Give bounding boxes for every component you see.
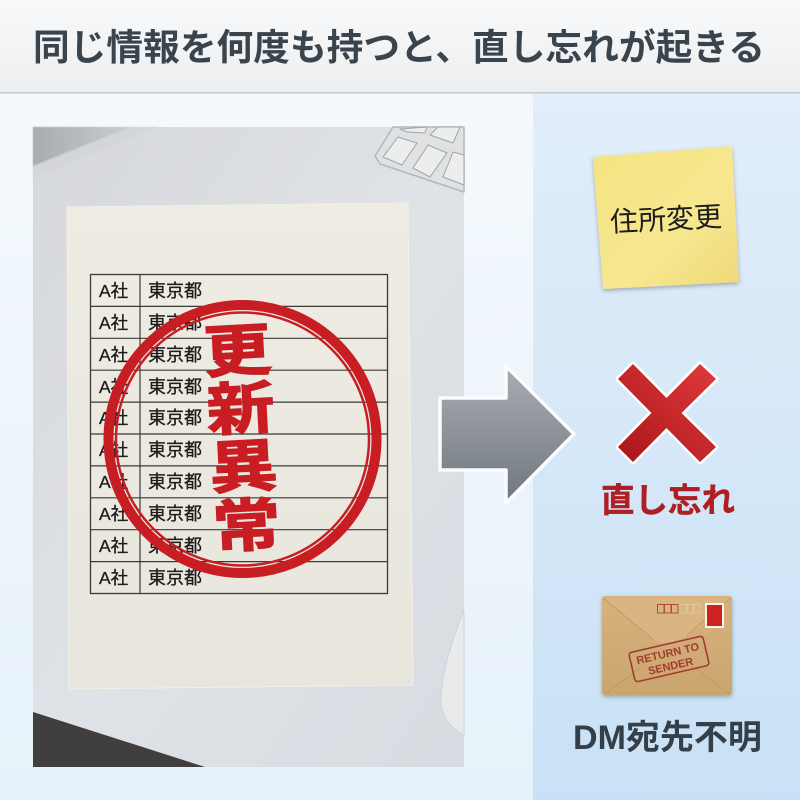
address table: A社: [99, 281, 128, 301]
address table: A社: [99, 313, 128, 333]
address table: 東京都: [148, 313, 202, 333]
red stamp: 新: [205, 376, 276, 444]
address table: A社: [99, 472, 128, 492]
postal code boxes: [658, 604, 700, 613]
left background panel: [0, 93, 533, 800]
address table: 東京都: [148, 408, 202, 428]
photo: document on desk: [33, 127, 464, 767]
postage stamp: [706, 604, 723, 627]
return to sender mark: SENDER: [647, 656, 695, 678]
red stamp: [108, 305, 376, 573]
dark desk corner: [33, 712, 205, 767]
address table: A社: [99, 408, 128, 428]
laptop corner: [33, 127, 158, 178]
arrow: [440, 366, 574, 503]
red stamp: 異: [208, 434, 279, 501]
address table: A社: [99, 440, 128, 460]
address table: [90, 274, 388, 594]
right background panel: [533, 93, 800, 800]
address table: 東京都: [148, 440, 202, 460]
address table: 東京都: [148, 536, 202, 556]
address table: 東京都: [148, 504, 202, 524]
address table: A社: [99, 536, 128, 556]
address table: A社: [99, 568, 128, 588]
address table: 東京都: [148, 472, 202, 492]
address table: 東京都: [148, 345, 202, 365]
mouse: [441, 610, 464, 735]
header band: [0, 0, 800, 94]
paper: [67, 203, 413, 689]
address table: 東京都: [148, 281, 202, 301]
label: DM address unknown: DM宛先不明: [573, 719, 762, 757]
return to sender mark: [629, 636, 709, 682]
address table: A社: [99, 377, 128, 397]
keyboard: [375, 127, 464, 192]
red stamp: 更: [202, 318, 273, 386]
address table: A社: [99, 345, 128, 365]
title: 同じ情報を何度も持つと、直し忘れが起きる: [33, 27, 765, 68]
address table: A社: [99, 504, 128, 524]
address table: 東京都: [148, 568, 202, 588]
red stamp: 常: [211, 493, 282, 560]
sticky note: [593, 146, 739, 289]
red cross icon: [618, 364, 716, 462]
note text: 住所変更: [609, 201, 723, 238]
return to sender mark: RETURN TO: [635, 641, 701, 667]
label: forgotten update: 直し忘れ: [601, 483, 735, 520]
envelope icon: [602, 596, 732, 695]
address table: 東京都: [148, 377, 202, 397]
